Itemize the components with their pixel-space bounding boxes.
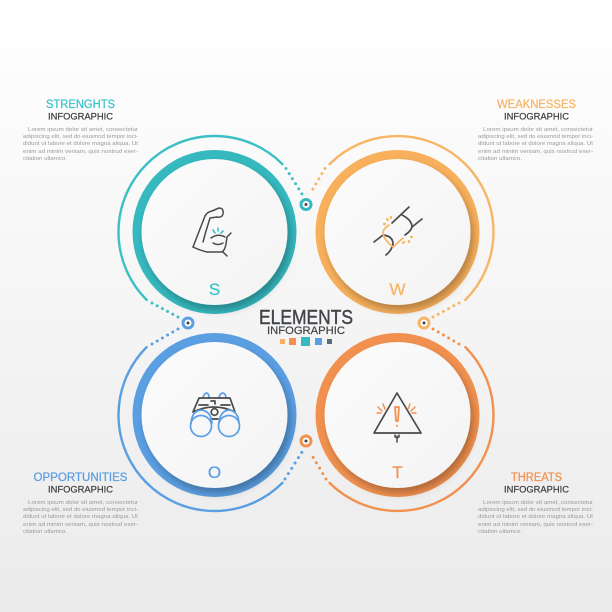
text block: strengths: adipiscing elit, sed do eiusmod tempor inci- xyxy=(23,134,138,140)
text block: strengths: enim ad minim veniam, quis nostrud exer- xyxy=(23,149,138,155)
text block: opportunities xyxy=(23,472,138,535)
letter O: O xyxy=(208,463,221,482)
heading: elements infographic: INFOGRAPHIC xyxy=(267,325,345,337)
icon: binoculars xyxy=(190,393,240,436)
text block: threats: adipiscing elit, sed do eiusmod tempor inci- xyxy=(478,507,593,513)
text block: weaknesses: WEAKNESSES xyxy=(497,99,576,111)
panel: S circle xyxy=(132,150,296,314)
text block: strengths: didunt ut labore et dolore magna aliqua. Ut xyxy=(23,141,138,147)
text block: opportunities: Lorem ipsum dolor sit amet, consectetur xyxy=(28,500,138,506)
colour squares xyxy=(280,337,332,346)
text block: strengths: citation ullamco. xyxy=(23,156,67,162)
panel: O circle xyxy=(132,333,296,497)
text block: weaknesses: INFOGRAPHIC xyxy=(504,112,569,122)
icon: broken chain xyxy=(374,207,422,255)
text block: opportunities: OPPORTUNITIES xyxy=(34,472,128,484)
outer arc: strengths xyxy=(118,136,302,317)
text block: strengths: INFOGRAPHIC xyxy=(48,112,113,122)
text block: threats: citation ullamco. xyxy=(478,529,522,535)
text block: weaknesses: Lorem ipsum dolor sit amet, consectetur xyxy=(483,127,593,133)
text block: threats: enim ad minim veniam, quis nostrud exer- xyxy=(478,522,593,528)
text block: opportunities: adipiscing elit, sed do eiusmod tempor inci- xyxy=(23,507,138,513)
node: bottom centre xyxy=(301,436,311,446)
letter S: S xyxy=(209,280,220,299)
text block: threats: didunt ut labore et dolore magna aliqua. Ut xyxy=(478,514,593,520)
text block: threats xyxy=(478,472,593,535)
text block: opportunities: enim ad minim veniam, quis nostrud exer- xyxy=(23,522,138,528)
text block: opportunities: citation ullamco. xyxy=(23,529,67,535)
text block: threats: INFOGRAPHIC xyxy=(504,484,569,496)
heading: elements infographic xyxy=(259,307,353,337)
node: left centre xyxy=(183,318,193,328)
text block: strengths: Lorem ipsum dolor sit amet, consectetur xyxy=(28,127,138,133)
panel: W circle xyxy=(316,150,480,314)
text block: weaknesses: enim ad minim veniam, quis nostrud exer- xyxy=(478,149,593,155)
text block: strengths: STRENGHTS xyxy=(46,99,115,111)
icon: warning triangle xyxy=(374,393,421,442)
text block: opportunities: INFOGRAPHIC xyxy=(48,484,113,496)
outer arc: threats xyxy=(310,329,493,511)
outer arc: opportunities xyxy=(118,329,302,511)
node: right centre xyxy=(419,318,429,328)
letter T: T xyxy=(392,463,403,482)
icon: flexed arm xyxy=(193,208,231,256)
text block: weaknesses: citation ullamco. xyxy=(478,156,522,162)
text block: threats: THREATS xyxy=(511,472,562,484)
text block: strengths xyxy=(23,99,138,162)
panel: T circle xyxy=(316,333,480,497)
letter W: W xyxy=(389,280,406,299)
text block: weaknesses: didunt ut labore et dolore magna aliqua. Ut xyxy=(478,141,593,147)
text block: weaknesses xyxy=(478,99,593,162)
text block: opportunities: didunt ut labore et dolore magna aliqua. Ut xyxy=(23,514,138,520)
text block: threats: Lorem ipsum dolor sit amet, consectetur xyxy=(483,500,593,506)
heading: elements infographic: ELEMENTS xyxy=(259,307,353,329)
text block: weaknesses: adipiscing elit, sed do eiusmod tempor inci- xyxy=(478,134,593,140)
outer arc: weaknesses xyxy=(310,136,493,317)
node: top centre xyxy=(301,200,311,210)
